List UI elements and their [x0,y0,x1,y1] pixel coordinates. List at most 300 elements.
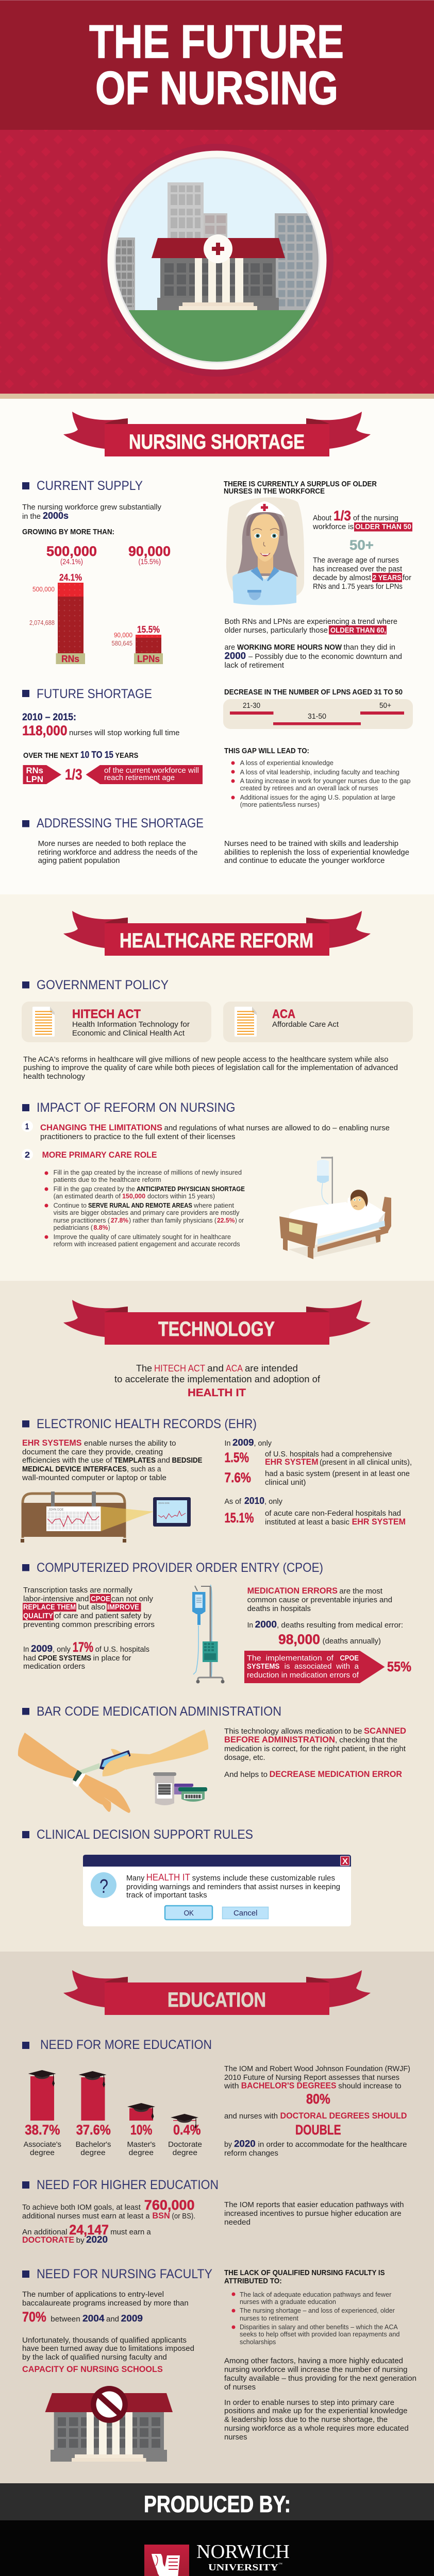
item 1: changing the limitations: 1 [25,1122,29,1131]
text: IOM goals: 2020 [86,2234,108,2245]
text: Norwich University Online wordmark: ™ [278,2562,282,2566]
list: primary care role details: Fill in the gap created by the increase of millions of newly insured [54,1169,242,1176]
text: 2010 EHR statistics: of acute care non-Federal hospitals had [265,1510,401,1518]
panel: HITECH Act [22,1002,211,1042]
icon: bedside monitor and tablet [21,1492,191,1543]
text: more nurses needed: More nurses are needed to both replace the [38,840,186,848]
chart: decrease in LPNs aged 31 to 50: 31-50 [308,713,326,721]
text: Norwich University Online wordmark [196,2541,290,2576]
chart: decrease in LPNs aged 31 to 50: 21-30 [243,702,260,710]
list: primary care role details: doctors within 15 years) [147,1193,215,1200]
text: older nurses working more hours [225,618,402,670]
text: easier education pathways [224,2201,404,2227]
text: medication errors: (deaths annually) [323,1637,381,1646]
text: EHR systems: wall-mounted computer or laptop or table [22,1474,166,1482]
text: 2009 EHR statistics: 1.5% [225,1450,249,1465]
text: workforce growth: 90,000 [128,544,171,559]
text: ACA reforms: pushing to improve the quality of care while both pieces of legislation call for the implementation of advanced [23,1064,398,1072]
text: 118,000 nurses: 118,000 [22,723,67,738]
text: more highly educated workforce [224,2357,416,2392]
text: average age 50+: The average age of nurses [313,556,399,565]
text: average age 50+: 2 YEARS [373,574,402,582]
list: lack of qualified nursing faculty [224,2268,400,2346]
text: technology intro: and [207,1363,224,1374]
bar chart: degree levels: degree [173,2149,197,2157]
bar chart: degree levels: Bachelor's [76,2141,111,2149]
heading: electronic health records: ELECTRONIC HEALTH RECORDS (EHR) [37,1417,257,1431]
icon: dialog window: ? [99,1876,108,1897]
text: medication errors: In [247,1621,253,1630]
heading: surplus of older nurses [224,480,377,496]
heading: education ribbon [63,1970,371,2015]
text: IOM and RWJF report: reform changes [224,2149,278,2158]
text: bar code scanning: dosage, etc. [224,1754,265,1762]
text: bar code scanning [224,1726,406,1779]
callout: CPOE reduces errors by 55%: reduction in medication errors of [247,1671,359,1680]
text: transcription tasks: but also [78,1603,105,1612]
icon: scanning a patient wristband [18,1730,208,1813]
heading: bar code medication administration: BAR CODE MEDICATION ADMINISTRATION [37,1704,281,1719]
bar chart: RN and LPN growth: RNs [61,654,79,664]
bar chart: degree levels: 10% [130,2122,152,2138]
text: IOM and RWJF report [224,2065,410,2158]
text: IOM goals: An additional [22,2228,67,2236]
panel: cover header [0,0,434,130]
text: older nurses working more hours: are [225,643,235,652]
text: nurses need training [224,840,409,865]
text: workforce growth: 2000s [43,511,69,521]
list: primary care role details: 22.5% [217,1217,235,1224]
text: workforce growth: in the [22,513,41,521]
list: primary care role details: nurse practitioners ( [54,1217,110,1224]
list: lack of qualified nursing faculty: nurses with a graduate education [240,2298,336,2306]
list: this gap will lead to: A loss of experiential knowledge [240,759,333,767]
text: IOM goals: To achieve both IOM goals, at least [22,2204,141,2212]
icon: dialog window: Cancel [233,1909,258,1918]
text: EHR systems [22,1438,203,1482]
list: primary care role details: Improve the quality of care ultimately sought for in healthcare [54,1233,231,1241]
text: older nurses working more hours: – Possibly due to the economic downturn and [248,653,402,661]
text: older nurses working more hours: than they did in [343,643,395,652]
callout: CPOE reduces errors by 55%: is associated with a [285,1663,359,1671]
list: primary care role details: visits are bigger obstacles and primary care providers are mostly [54,1209,240,1216]
text: one third older than 50: of the nursing [353,514,398,522]
text: nurses need training: Nurses need to be trained with skills and leadership [224,840,398,848]
text: average age 50+: decade by almost [313,574,371,582]
text: medication errors [247,1586,403,1647]
bar chart: RN and LPN growth: 90,000 [114,632,132,639]
bar chart: RN and LPN growth: 24.1% [59,572,82,583]
text: 2009 EHR statistics: clinical unit) [265,1479,306,1487]
item 1: changing the limitations: CHANGING THE LIMITATIONS [40,1123,162,1132]
text: applications increased: between [51,2315,80,2324]
text: workforce growth: The nursing workforce grew substantially [22,503,162,512]
text: technology intro: ACA [226,1363,243,1374]
text: transcription tasks: IMPROVE [107,1603,139,1612]
list: lack of qualified nursing faculty: The nursing shortage – and loss of experienced, older [240,2307,395,2314]
icon: bedside monitor and tablet: JOHN DOE [158,1502,170,1504]
item 1: changing the limitations: practitioners to practice to the full extent of their licenses [40,1133,235,1141]
text: transcription tasks: of care and patient safety by [55,1612,152,1620]
text: transcription tasks: CPOE [91,1595,110,1603]
callout: one third reach retirement age: 1/3 [65,767,82,783]
text: transcription tasks: preventing common prescribing errors [23,1621,155,1629]
heading: nursing shortage ribbon: NURSING SHORTAGE [129,431,305,453]
list: primary care role details: SERVE RURAL AND REMOTE AREAS [88,1202,192,1209]
text: older nurses working more hours: 2000 [225,651,246,661]
text: 2010 EHR statistics: instituted at least a basic [265,1518,349,1527]
icon: dialog window: Many [126,1874,145,1883]
heading: addressing the shortage: ADDRESSING THE SHORTAGE [37,816,204,831]
text: older nurses working more hours: OLDER THAN 60, [330,626,386,635]
text: medication errors: common cause or preventable injuries and [247,1596,392,1604]
list: lack of qualified nursing faculty: THE LACK OF QUALIFIED NURSING FACULTY IS [224,2268,385,2277]
text: primary care positions: nursing workforce as a whole requires more educated [224,2425,409,2433]
heading: education ribbon: EDUCATION [168,1989,266,2011]
text: Norwich University Online wordmark: UNIVERSITY [208,2562,278,2572]
list: primary care role details: ) rather than family physicians ( [129,1217,217,1224]
panel: HITECH Act: Economic and Clinical Health Act [72,1029,185,1038]
text: easier education pathways: The IOM reports that easier education pathways with [224,2201,404,2209]
icon: bedside monitor and tablet: JOHN DOE [48,1508,64,1512]
text: bar code scanning: , checking that the [335,1736,397,1744]
bar chart: degree levels: degree [80,2149,106,2157]
text: Norwich University Online wordmark: NORWICH [196,2541,290,2563]
text: 2009 EHR statistics: of U.S. hospitals had a comprehensive [265,1450,392,1459]
bar chart: RN and LPN growth: 580,645 [111,640,132,647]
text: ACA reforms [23,1056,398,1081]
heading: impact of reform on nursing: IMPACT OF REFORM ON NURSING [37,1100,235,1115]
list: this gap will lead to: Additional issues for the aging U.S. population at large [240,794,395,801]
text: older nurses working more hours: Both RNs and LPNs are experiencing a trend where [225,618,397,626]
text: EHR systems: TEMPLATES [114,1456,156,1465]
heading: surplus of older nurses: THERE IS CURRENTLY A SURPLUS OF OLDER [224,480,377,488]
text: medication errors: are the most [339,1587,382,1596]
text: primary care positions: nurses [224,2433,247,2442]
text: more highly educated workforce: of nurses [224,2383,256,2392]
list: this gap will lead to: A taxing increase in work for younger nurses due to the gap [240,777,411,785]
text: technology intro: The [136,1363,152,1374]
text: 118,000 nurses [22,712,179,760]
text: EHR systems: enable nurses the ability to [84,1439,176,1448]
callout: CPOE reduces errors by 55%: The implementation of [247,1654,334,1663]
callout: CPOE reduces errors by 55% [244,1651,411,1683]
text: 2010 EHR statistics: EHR SYSTEM [352,1517,406,1527]
icon: hospital in circular frame [101,144,333,377]
text: IOM and RWJF report: should increase to [338,2082,402,2091]
list: primary care role details: ANTICIPATED PHYSICIAN SHORTAGE [137,1185,245,1193]
text: technology intro: HITECH ACT [154,1363,205,1374]
text: one third older than 50: OLDER THAN 50 [355,523,411,531]
text: IOM and RWJF report: 80% [306,2091,330,2107]
panel: technology [0,1281,434,1952]
text: IOM goals: 760,000 [144,2197,195,2213]
heading: need for nursing faculty: NEED FOR NURSING FACULTY [37,2267,212,2281]
text: applications increased: CAPACITY OF NURSING SCHOOLS [22,2364,163,2374]
text: 17% of hospitals had CPOE: In [23,1646,29,1654]
chart: decrease in LPNs aged 31 to 50: DECREASE IN THE NUMBER OF LPNS AGED 31 TO 50 [224,688,403,697]
heading: produced by: PRODUCED BY: [144,2491,291,2517]
icon: dialog window: HEALTH IT [146,1872,190,1883]
panel: education [0,1952,434,2483]
text: bar code scanning: And helps to [224,1771,268,1779]
text: medication errors: , deaths resulting from medical error: [277,1621,403,1630]
bar chart: degree levels: degree [30,2149,55,2157]
list: lack of qualified nursing faculty: ATTRIBUTED TO: [224,2277,282,2285]
icon: dialog window: track of important tasks [126,1891,207,1900]
text: 2010 EHR statistics: 2010 [244,1496,264,1506]
text: applications increased: The number of applications to entry-level [22,2291,164,2299]
text: applications increased: and [106,2315,119,2324]
list: primary care role details: patients due to the healthcare reform [54,1176,161,1183]
heading: current supply: CURRENT SUPPLY [37,479,143,493]
bar chart: RN and LPN growth: 2,074,688 [29,619,55,626]
text: primary care positions: & leadership loss due to the nurse shortage, the [224,2416,388,2424]
list: primary care role details: reform with increased patient engagement and accurate records [54,1241,240,1248]
text: 17% of hospitals had CPOE: CPOE SYSTEMS [38,1654,91,1663]
text: IOM and RWJF report: DOUBLE [295,2122,341,2138]
list: primary care role details: 27.8% [111,1217,128,1224]
list: primary care role details: 8.8% [94,1224,108,1231]
text: 2009 EHR statistics: 2009 [232,1437,254,1448]
text: applications increased: baccalaureate programs increased by more than [22,2299,189,2308]
text: easier education pathways: increased incentives to pursue higher education are [224,2210,402,2218]
list: lack of qualified nursing faculty: seeks to help offset with provided loan repayments and [240,2331,400,2338]
text: workforce growth [22,503,171,566]
text: primary care positions: positions and make up for the experiential knowledge [224,2407,407,2415]
list: primary care role details: (an estimated dearth of [54,1193,121,1200]
text: EHR systems: , such as a [127,1465,161,1473]
text: 2010 EHR statistics: , only [264,1498,283,1506]
text: transcription tasks [23,1586,155,1629]
panel: ACA [223,1002,413,1042]
bar chart: degree levels: 38.7% [25,2122,60,2138]
text: 17% of hospitals had CPOE: had [23,1654,36,1663]
list: lack of qualified nursing faculty: scholarships [240,2338,276,2346]
text: IOM goals: (or BS). [172,2212,195,2221]
panel: produced by [0,2483,434,2520]
heading: government policy: GOVERNMENT POLICY [37,978,169,992]
text: medication errors: MEDICATION ERRORS [247,1586,338,1596]
icon: dialog window: X [342,1857,348,1866]
icon: dialog window: systems include these customizable rules [192,1874,335,1883]
text: IOM and RWJF report: 2010 Future of Nursing Report assesses that nurses [224,2074,399,2082]
list: primary care role details: pediatricians ( [54,1224,93,1231]
text: EHR systems: and [157,1456,170,1465]
item 2: more primary care role: MORE PRIMARY CARE ROLE [42,1150,157,1160]
text: 2010 EHR statistics: 15.1% [225,1510,254,1526]
text: 118,000 nurses: YEARS [115,751,138,760]
text: IOM and RWJF report: BACHELOR'S DEGREES [241,2080,336,2091]
text: technology intro: to accelerate the implementation and adoption of [114,1374,321,1384]
text: 118,000 nurses: nurses will stop working full time [69,729,179,737]
bar chart: RN and LPN growth: 500,000 [32,586,55,593]
text: bar code scanning: This technology allows medication to be [224,1727,362,1736]
heading: surplus of older nurses: NURSES IN THE WORKFORCE [224,487,325,496]
text: older nurses working more hours: older nurses, particularly those [225,626,328,635]
text: 118,000 nurses: 2010 – 2015: [22,712,76,723]
icon: dialog window [83,1855,351,1926]
text: average age 50+: for [403,574,411,582]
text: more nurses needed: retiring workforce and address the needs of the [38,849,197,857]
bar chart: degree levels: Associate's [24,2141,61,2149]
icon: dialog window: providing warnings and reminders that assist nurses in keeping [126,1883,340,1891]
callout: CPOE reduces errors by 55%: CPOE [340,1654,359,1663]
text: EHR systems: document the care they provide, creating [22,1448,163,1456]
panel: HITECH Act: Health Information Technology for [72,1021,190,1029]
text: bar code scanning: medication is correct, for the right patient, in the right [224,1745,406,1753]
list: this gap will lead to: created by retirees and an overall lack of nurses [240,785,378,792]
text: technology intro: HEALTH IT [188,1387,246,1399]
bar chart: degree levels [24,2070,202,2157]
text: workforce growth: (24.1%) [60,558,83,566]
text: bar code scanning: BEFORE ADMINISTRATION [224,1735,335,1744]
chart: decrease in LPNs aged 31 to 50 [223,688,413,729]
text: 17% of hospitals had CPOE: of U.S. hospitals [95,1646,149,1654]
item 1: changing the limitations: and regulations of what nurses are allowed to do – enabling nurse [164,1124,390,1132]
bar chart: RN and LPN growth: LPNs [137,654,160,664]
title: OF NURSING [95,62,338,114]
text: 118,000 nurses: 10 TO 15 [80,750,113,760]
text: ACA reforms: The ACA's reforms in healthcare will give millions of new people access to the healthcare system while also [23,1056,389,1064]
text: medication errors: 98,000 [278,1632,320,1647]
heading: healthcare reform ribbon: HEALTHCARE REFORM [120,929,313,952]
text: bar code scanning: SCANNED [364,1726,406,1736]
text: applications increased [22,2291,194,2374]
heading: need for more education: NEED FOR MORE EDUCATION [40,2038,212,2052]
text: IOM goals: BSN [152,2211,170,2221]
text: medication errors: deaths in hospitals [247,1605,311,1613]
list: lack of qualified nursing faculty: The lack of adequate education pathways and fewer [240,2291,391,2298]
list: primary care role details: 150,000 [122,1193,145,1200]
text: IOM and RWJF report: in order to accommodate for the healthcare [258,2141,407,2149]
text: more nurses needed [38,840,197,865]
text: technology intro [114,1363,321,1399]
text: IOM and RWJF report: DOCTORAL DEGREES SHOULD [280,2111,407,2121]
list: this gap will lead to [224,747,411,808]
text: IOM goals: DOCTORATE [22,2235,74,2245]
panel: HITECH Act: HITECH ACT [72,1007,141,1021]
text: transcription tasks: QUALITY [23,1612,53,1620]
text: transcription tasks: can not only [111,1595,154,1603]
title: THE FUTURE [89,16,344,68]
panel: ACA: ACA [272,1007,295,1021]
heading: healthcare reform ribbon [63,911,371,956]
icon: dialog window: OK [184,1909,194,1918]
list: primary care role details: ) or [235,1217,244,1224]
title [89,16,344,114]
text: transcription tasks: Transcription tasks are normally [23,1586,132,1595]
text: 2009 EHR statistics: , only [254,1439,272,1448]
text: average age 50+: 50+ [349,537,374,553]
text: applications increased: by the lack of qualified nursing faculty and [22,2353,167,2362]
callout: one third reach retirement age: LPN [26,774,43,784]
text: IOM goals: additional nurses must earn at least a [22,2212,150,2221]
text: transcription tasks: REPLACE THEM [23,1603,76,1612]
text: EHR systems: MEDICAL DEVICE INTERFACES [22,1465,127,1473]
icon: IV stand and pump [192,1585,225,1684]
text: workforce growth: 500,000 [46,544,97,559]
callout: one third reach retirement age: of the current workforce will [104,767,199,775]
text: applications increased: 2004 [82,2313,104,2324]
panel: nursing shortage [0,399,434,894]
list: this gap will lead to: (more patients/less nurses) [240,801,320,808]
panel: ACA: Affordable Care Act [272,1021,339,1029]
bar chart: degree levels: 37.6% [76,2122,111,2138]
panel: Norwich University logo [0,2520,434,2576]
text: 17% of hospitals had CPOE: in place for [93,1654,131,1663]
icon: patient in hospital bed with IV [279,1157,391,1259]
item 1: changing the limitations [22,1121,390,1141]
heading: nursing shortage ribbon [63,412,371,456]
list: primary care role details: where patient [193,1202,235,1209]
text: 17% of hospitals had CPOE: 17% [73,1639,93,1655]
text: 2010 EHR statistics [225,1496,406,1527]
panel: hospital illustration background [0,130,434,399]
text: one third older than 50: About [313,514,331,522]
list: lack of qualified nursing faculty: Disparities in salary and other benefits – which the ACA [240,2324,398,2331]
text: 17% of hospitals had CPOE: medication orders [23,1663,85,1671]
text: applications increased: 2009 [121,2313,143,2324]
bar chart: RN and LPN growth: 15.5% [137,624,160,635]
callout: one third reach retirement age: reach retirement age [104,774,175,782]
list: primary care role details: Continue to [54,1202,87,1209]
text: bar code scanning: DECREASE MEDICATION ERROR [270,1769,402,1779]
text: average age 50+: RNs and 1.75 years for LPNs [313,583,403,591]
bar chart: degree levels: 0.4% [173,2122,201,2138]
callout: CPOE reduces errors by 55%: SYSTEMS [247,1663,280,1671]
list: this gap will lead to: THIS GAP WILL LEAD TO: [224,747,309,755]
text: 2009 EHR statistics: In [225,1439,231,1448]
callout: one third reach retirement age [23,765,203,784]
text: applications increased: have been turned away due to limitations imposed [22,2345,194,2353]
icon: nurse portrait [226,497,304,605]
text: IOM goals: by [76,2236,85,2245]
text: 2009 EHR statistics: had a basic system (present in at least one [265,1470,410,1478]
panel: healthcare reform [0,894,434,1281]
text: IOM goals: must earn a [110,2228,152,2236]
text: one third older than 50: 1/3 [333,508,351,523]
text: primary care positions: In order to enable nurses to step into primary care [224,2399,394,2407]
text: IOM and RWJF report: by [224,2141,232,2149]
heading: technology ribbon [63,1300,371,1345]
text: workforce growth: (15.5%) [138,558,161,566]
text: 2009 EHR statistics: (present in all clinical units), [320,1459,412,1467]
text: medication errors: 2000 [255,1619,277,1630]
text: EHR systems: BEDSIDE [172,1456,203,1465]
list: primary care role details: Fill in the gap created by the [54,1185,135,1193]
text: 17% of hospitals had CPOE [23,1639,149,1671]
text: more nurses needed: aging patient population [38,857,120,865]
text: older nurses working more hours: WORKING MORE HOURS NOW [237,643,342,652]
list: primary care role details [44,1169,245,1248]
text: nurses need training: abilities to replenish the loss of experiential knowledge [224,849,409,857]
text: IOM goals [22,2197,195,2245]
icon: closed nursing school [45,2386,173,2462]
text: one third older than 50 [312,508,412,532]
text: average age 50+: has increased over the past [313,565,402,573]
text: applications increased: Unfortunately, thousands of qualified applicants [22,2336,187,2345]
text: transcription tasks: labor-intensive and [23,1595,89,1603]
text: EHR systems: efficiencies with the use of [22,1456,112,1465]
text: one third older than 50: workforce is [312,523,354,531]
text: 118,000 nurses: OVER THE NEXT [23,751,78,760]
heading: computerized provider order entry: COMPUTERIZED PROVIDER ORDER ENTRY (CPOE) [37,1561,323,1575]
text: ACA reforms: health technology [23,1073,86,1081]
text: IOM goals: 24,147 [69,2222,109,2238]
text: 2009 EHR statistics: EHR SYSTEM [265,1457,319,1467]
text: average age 50+ [313,537,411,591]
